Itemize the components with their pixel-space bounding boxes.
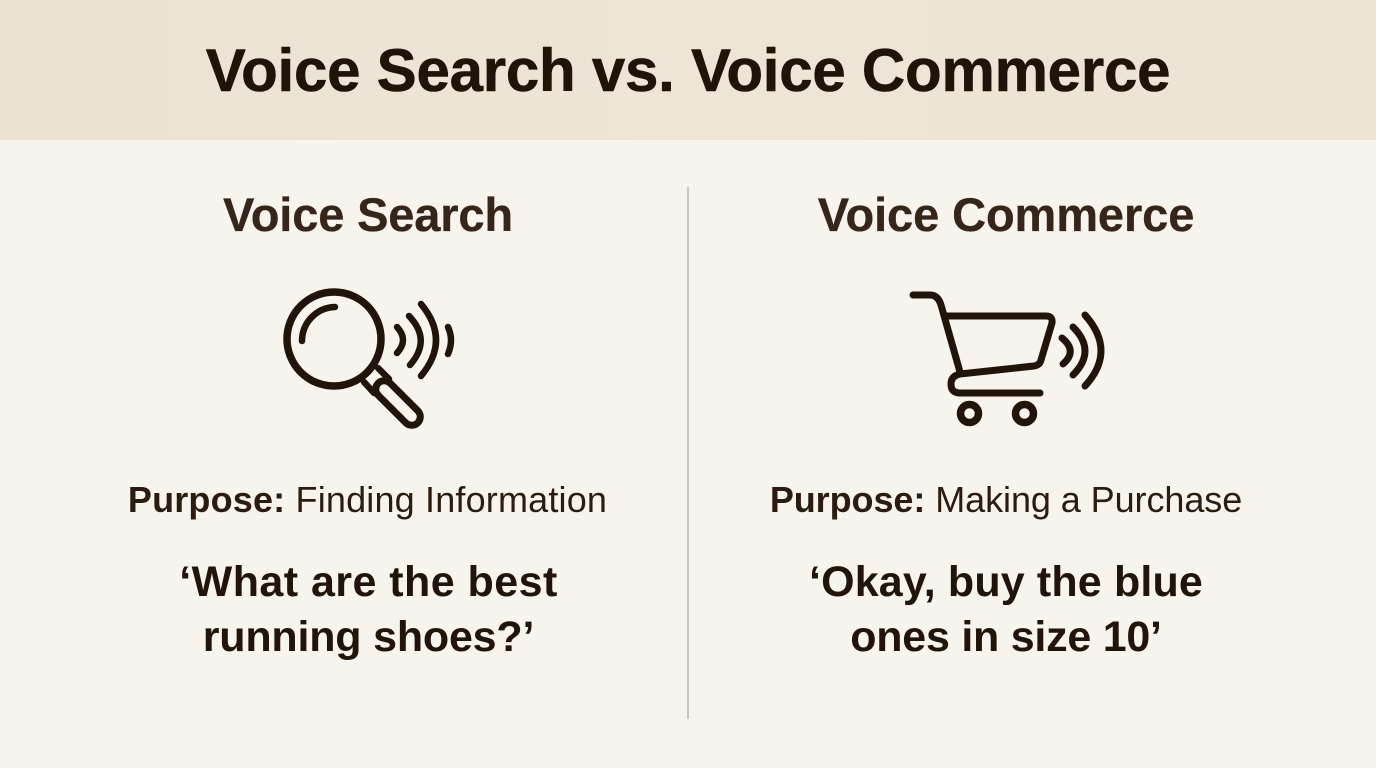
centre divider [687,187,688,719]
title: Voice Search vs. Voice Commerce [206,37,1170,104]
quote: voice commerce [809,558,1203,661]
quote: voice commerce: ‘Okay, buy the blue [809,558,1203,606]
panel: voice search [128,188,607,661]
icon: magnifier with sound waves [283,288,454,429]
quote: voice search: running shoes?’ [203,613,534,661]
heading: voice search: Voice Search [223,188,513,241]
quote: voice search [179,558,558,661]
header band [0,0,1376,140]
panel: voice commerce [770,188,1242,661]
icon: shopping cart with sound waves [910,292,1104,426]
heading: voice commerce: Voice Commerce [818,188,1194,241]
purpose: voice search: Purpose: Finding Information [128,479,607,520]
purpose: voice commerce: Purpose: Making a Purchase [770,479,1242,520]
quote: voice search: ‘What are the best [179,558,558,606]
quote: voice commerce: ones in size 10’ [850,613,1162,661]
